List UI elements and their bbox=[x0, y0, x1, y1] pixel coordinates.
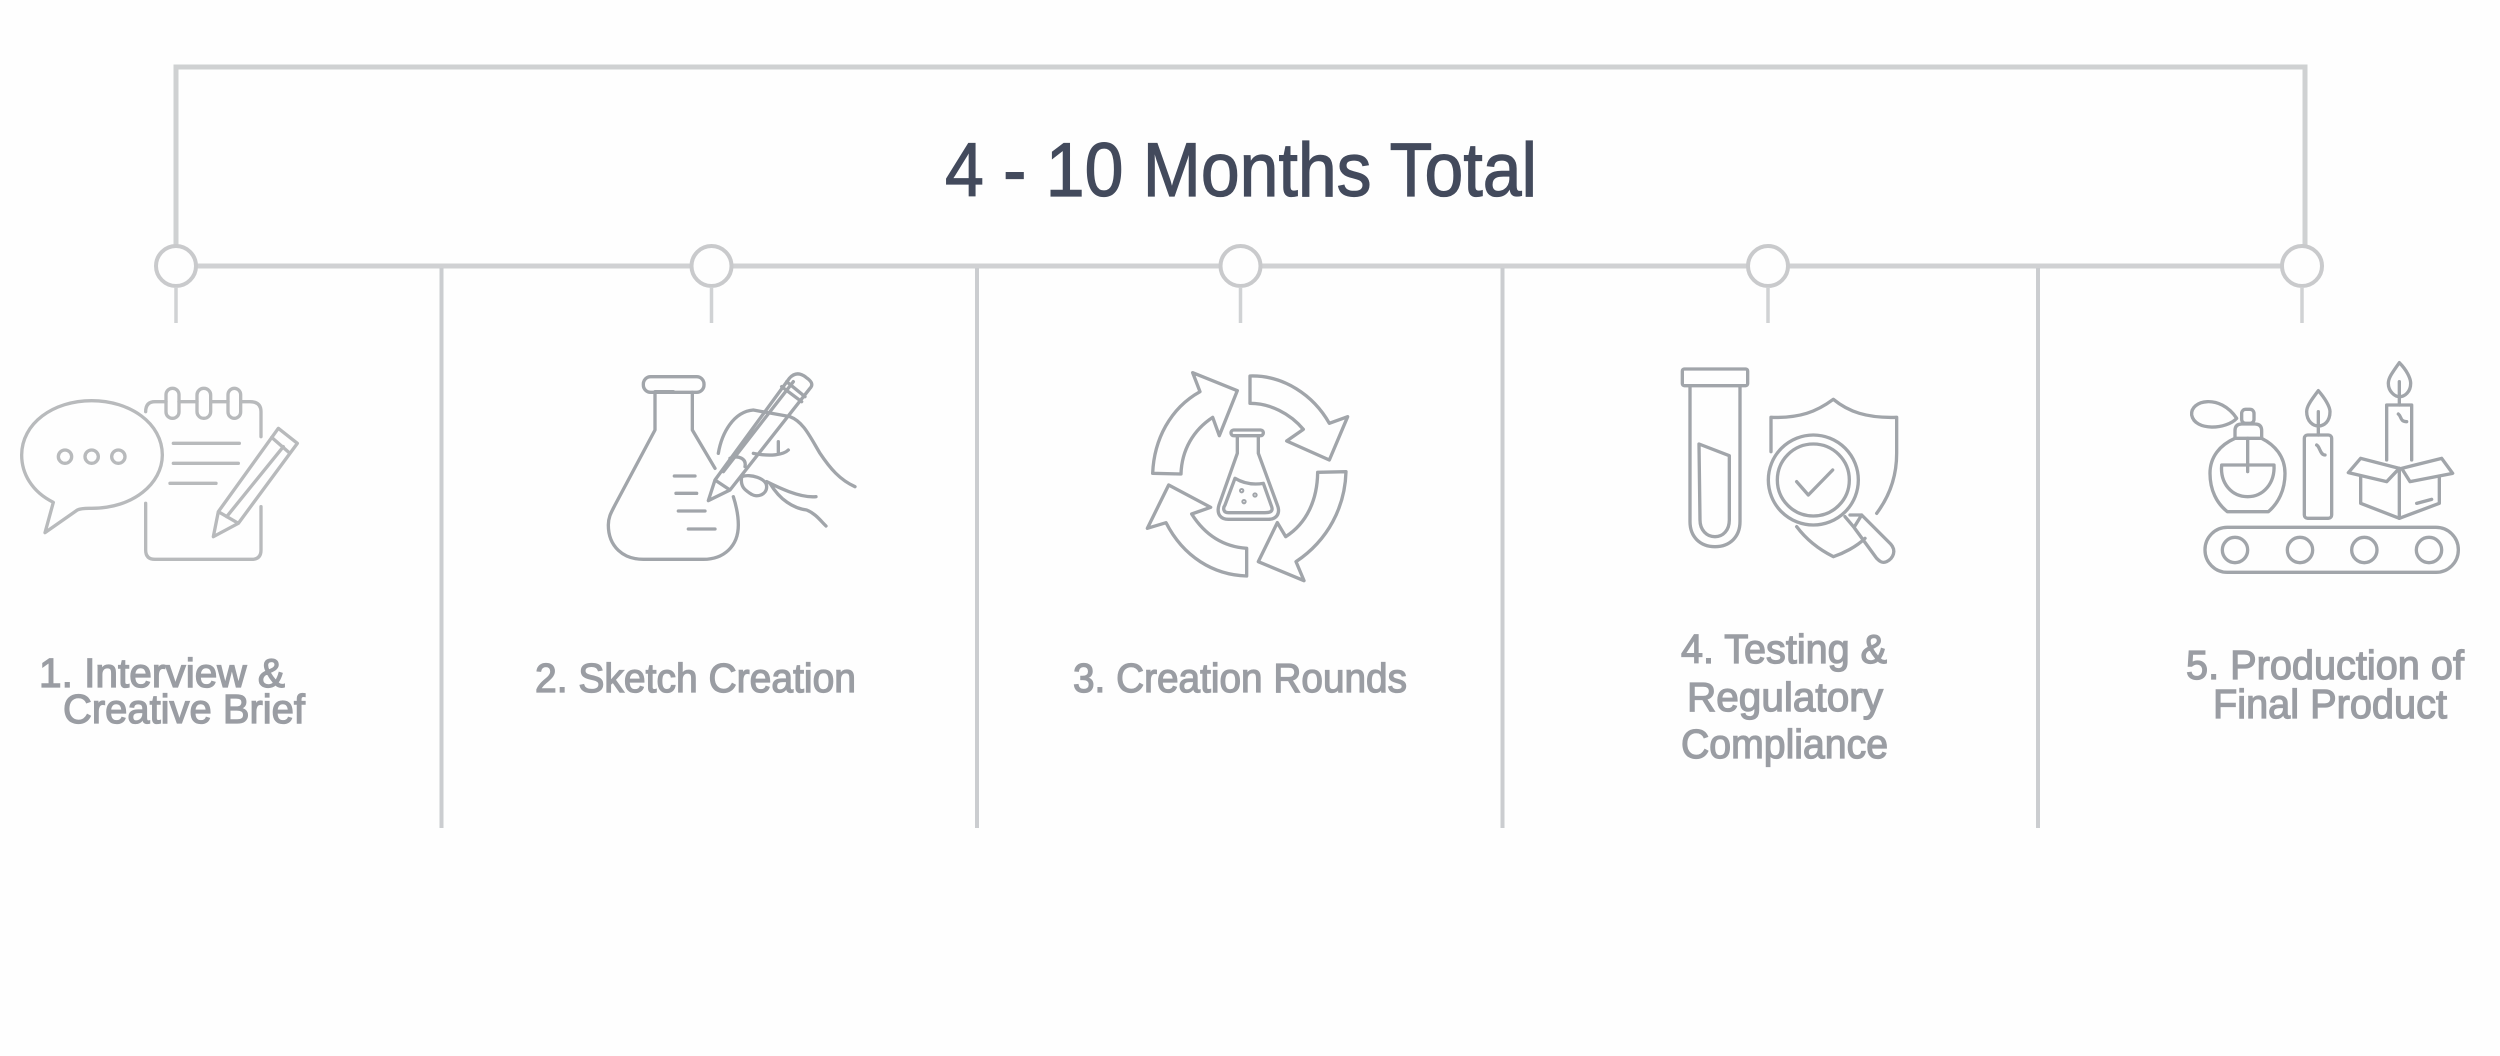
label: step 5: Final Product bbox=[2213, 681, 2448, 727]
column dividers bbox=[442, 268, 2038, 828]
label: step 4: 4. Testing & bbox=[1681, 626, 1887, 672]
label: step 1: Creative Brief bbox=[63, 686, 306, 732]
label: step 3: 3. Creation Rounds bbox=[1073, 655, 1407, 701]
icon: speech bubble and notepad bbox=[22, 388, 297, 559]
icon: perfume, candles and box on conveyor bbox=[2192, 363, 2458, 572]
label: step 5: 5. Production of bbox=[2186, 642, 2465, 688]
label: step 4 bbox=[1681, 626, 1888, 767]
panel: step 4 bbox=[1681, 369, 1897, 767]
panel: step 3 bbox=[1073, 373, 1407, 701]
panel: step 5 bbox=[2186, 363, 2465, 727]
panel: step 2 bbox=[535, 374, 856, 701]
label: step 4: Compliance bbox=[1681, 721, 1888, 767]
panel: step 1 bbox=[22, 388, 306, 732]
icon: test tube and shield with magnifier bbox=[1682, 369, 1897, 562]
label: step 1: 1. Interview & bbox=[39, 650, 285, 696]
label: step 2: 2. Sketch Creation bbox=[535, 655, 856, 701]
bracket: total duration frame bbox=[176, 67, 2305, 246]
timeline axis bbox=[196, 264, 2282, 268]
title: 4 - 10 Months Total bbox=[945, 128, 1537, 213]
label: step 5 bbox=[2186, 642, 2465, 727]
icon: cycle arrows around flask bbox=[1147, 373, 1348, 581]
timeline nodes bbox=[156, 246, 2322, 323]
icon: flask and hand sketching bbox=[608, 374, 855, 559]
label: step 1 bbox=[39, 650, 306, 732]
label: step 4: Regulatory bbox=[1687, 674, 1883, 720]
